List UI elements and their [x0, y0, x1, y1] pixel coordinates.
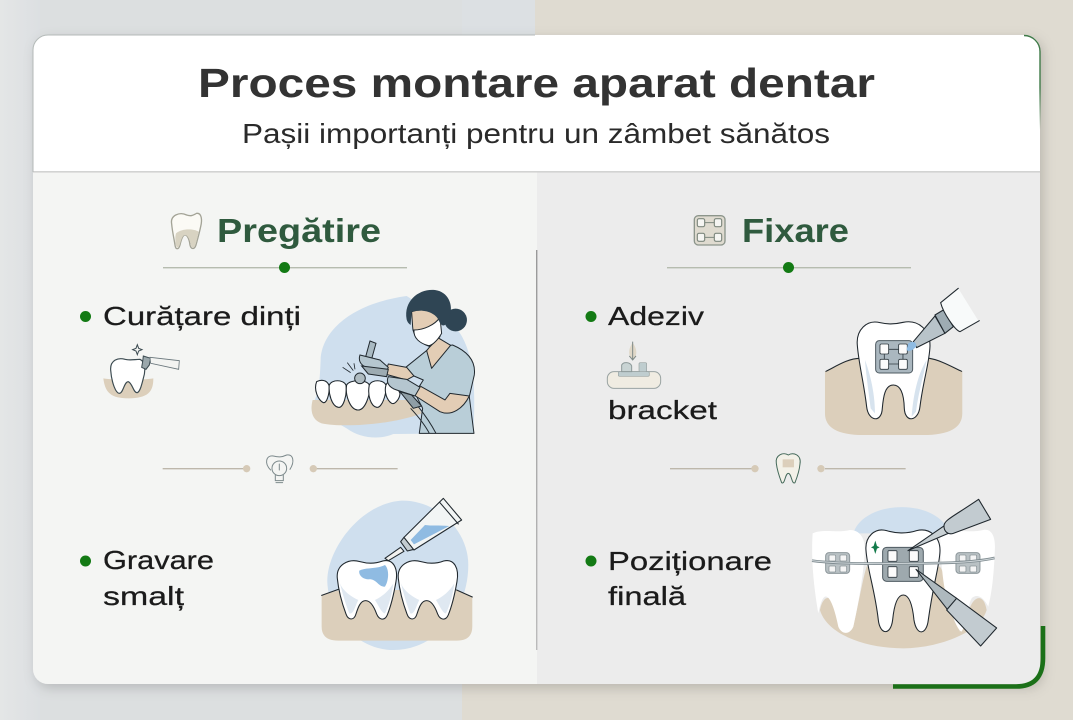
label	[608, 546, 772, 611]
bullet	[586, 311, 596, 322]
icon: tooth polishing small	[103, 345, 179, 398]
label: bracket: bracket	[608, 395, 718, 425]
bullet	[80, 311, 91, 322]
bottom right green corner	[893, 626, 1043, 686]
illustration: final bracket positioning	[812, 499, 997, 648]
label: Poziționare	[608, 546, 772, 576]
step: Curățare dinți	[80, 301, 301, 331]
divider with tooth icon	[670, 454, 906, 483]
illustration: adhesive on bracket	[825, 288, 979, 435]
illustration: dentist cleaning teeth	[312, 290, 475, 437]
icon: tooth heading	[171, 213, 201, 249]
step: Poziționare finală	[586, 546, 772, 611]
top right green edge	[535, 36, 1040, 130]
subtitle: Pașii importanți pentru un zâmbet sănătos	[242, 118, 830, 149]
label	[103, 545, 214, 611]
center divider	[536, 250, 537, 650]
bullet	[80, 556, 91, 566]
panel: Pregătire	[80, 212, 475, 650]
divider with bulb icon	[163, 455, 398, 483]
label: Adeziv	[608, 301, 704, 331]
icon: bracket placement small	[607, 342, 661, 388]
heading divider	[667, 262, 911, 273]
step: Gravare smalț	[80, 545, 214, 611]
label: Curățare dinți	[103, 301, 301, 331]
title: Proces montare aparat dentar	[198, 60, 875, 106]
step: Adeziv bracket	[586, 301, 704, 331]
label: finală	[608, 581, 687, 611]
bullet	[586, 556, 596, 566]
icon: bracket heading	[694, 216, 725, 245]
heading: Pregătire: Pregătire	[217, 212, 381, 249]
panel: Fixare	[586, 212, 997, 648]
illustration: enamel etching	[322, 498, 472, 650]
label: Gravare	[103, 545, 214, 575]
label: smalț	[103, 581, 185, 611]
heading: Fixare: Fixare	[742, 212, 849, 249]
heading divider	[163, 262, 407, 273]
